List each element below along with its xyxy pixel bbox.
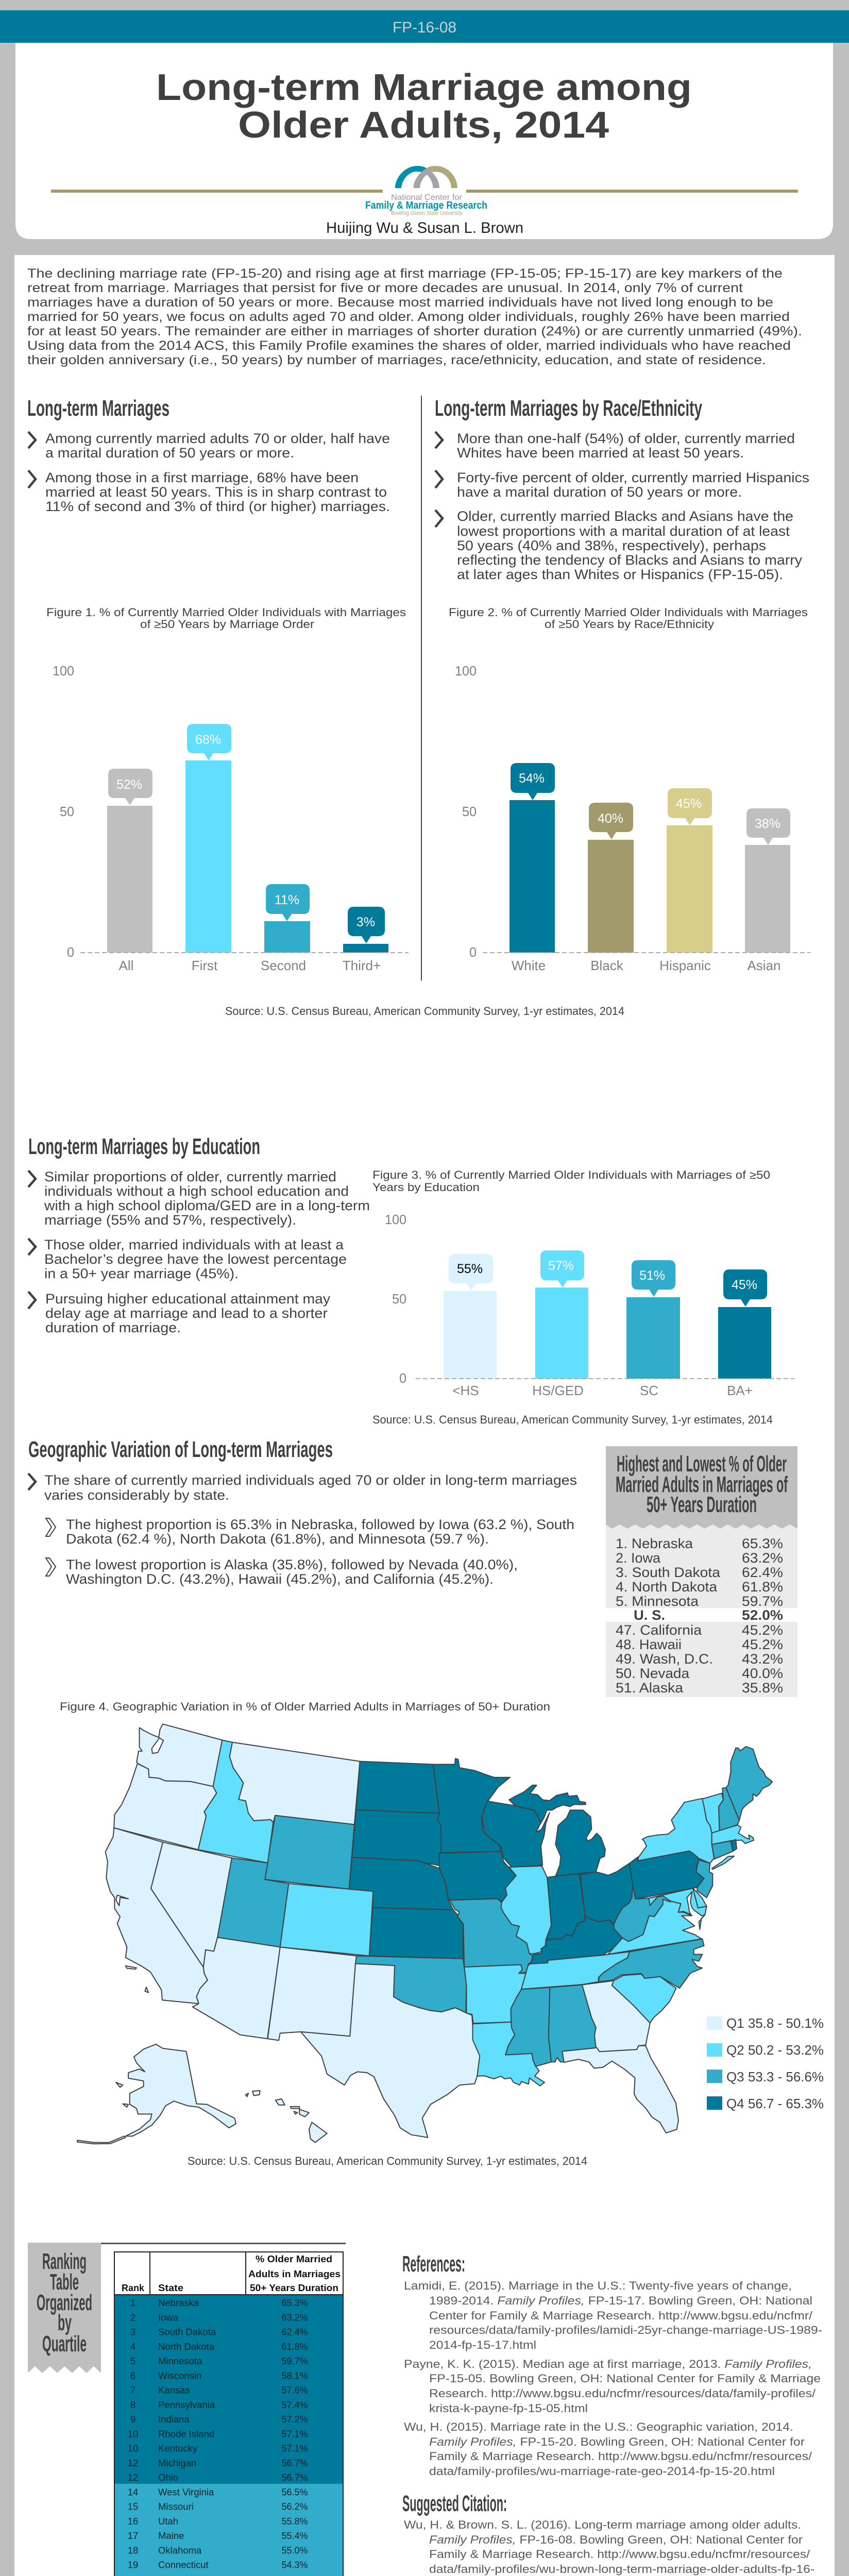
western and plains states: [77, 1724, 516, 2144]
reference: Wu: Family & Marriage Research. http://www.bgsu.edu/ncfmr/resources/: [429, 2450, 812, 2463]
top five list: 59.7%: [742, 1594, 783, 1609]
source note: figures 1 and 2: Source: U.S. Census Bureau, American Community Survey, 1-yr estimates, 2014: [225, 1005, 624, 1018]
bullet: similar proportions: marriage (55% and 57%, respectively).: [44, 1212, 296, 1228]
quartile 3 rows: 56.5%: [281, 2487, 308, 2497]
quartile 3 rows: Oklahoma: [158, 2545, 202, 2555]
sub-bullet: lowest: [46, 1557, 518, 1587]
map legend: Q2 50.2 - 53.2%: [726, 2042, 824, 2058]
top five list: 65.3%: [742, 1536, 783, 1551]
ranking table: [114, 2252, 343, 2576]
bottom five list: 50. Nevada: [616, 1666, 690, 1681]
bar: less than high school: 55%: [457, 1262, 483, 1276]
y axis labels: 50: [462, 804, 477, 819]
bullet: educational attainment: delay age at marriage and lead to a shorter: [45, 1306, 328, 1321]
ranking ribbon: [28, 2243, 346, 2373]
quartile 4 rows: 57.4%: [281, 2400, 308, 2410]
reference: Lamidi: 2014-fp-15-17.html: [429, 2338, 536, 2351]
bar: hispanic: 45%: [676, 796, 702, 811]
y axis labels: 0: [399, 1370, 406, 1386]
bottom five list: 43.2%: [742, 1651, 783, 1667]
citation text: Wu, H. & Brown. S. L. (2016). Long-term marriage among older adults.: [404, 2518, 801, 2531]
reference: Payne: krista-k-payne-fp-15-05.html: [429, 2402, 588, 2415]
authors: Huijing Wu & Susan L. Brown: [326, 219, 523, 236]
logo text: [365, 193, 487, 216]
bar: SC: [626, 1260, 680, 1379]
bullet: blacks and asians: 50 years (40% and 38%, respectively), perhaps: [457, 538, 766, 553]
quartile 3 rows: 56.2%: [281, 2502, 308, 2512]
south-central and southeastern states: [450, 1866, 678, 2133]
quartile 4 rows: 62.4%: [281, 2327, 308, 2337]
quartile 3 rows: 18: [128, 2545, 138, 2555]
bar: all: 52%: [116, 777, 142, 792]
Great Lakes and northeastern states: [509, 1747, 772, 1989]
map legend: [707, 2015, 824, 2111]
quartile 4 rows: Wisconsin: [158, 2370, 201, 2381]
quartile 4 rows: 10: [128, 2428, 138, 2439]
intro paragraph: Using data from the 2014 ACS, this Family Profile examines the shares of older, married individuals who have reached: [27, 338, 791, 353]
U.S. row: 52.0%: [742, 1607, 783, 1623]
ranking ribbon: Organized: [37, 2290, 92, 2315]
bottom five list: 49. Wash, D.C.: [616, 1651, 713, 1667]
sub-bullet: lowest: Washington D.C. (43.2%), Hawaii (45.2%), and California (45.2%).: [66, 1571, 494, 1587]
intro paragraph: for at least 50 years. The remainder are either in marriages of shorter duration (24%) or are currently unmarried (49%).: [27, 324, 802, 338]
y axis labels: 50: [60, 804, 74, 819]
top five list: 5. Minnesota: [616, 1594, 699, 1609]
bullet: first marriage: 11% of second and 3% of third (or higher) marriages.: [45, 499, 390, 514]
bullet: whites: More than one-half (54%) of older, currently married: [457, 431, 795, 446]
citation text: Family & Marriage Research. http://www.bgsu.edu/ncfmr/resources/: [429, 2548, 810, 2561]
quartile 4 rows: 65.3%: [281, 2298, 308, 2308]
vertical column divider: [421, 396, 422, 980]
figure 3 title: Figure 3. % of Currently Married Older Individuals with Marriages of ≥50: [372, 1168, 770, 1181]
bullet: whites: [435, 431, 795, 461]
reference: Wu: Wu, H. (2015). Marriage rate in the U.S.: Geographic variation, 2014.: [404, 2420, 793, 2433]
logo text: Family & Marriage Research: [365, 200, 487, 211]
ranking ribbon: by: [58, 2310, 72, 2335]
sidebar heading: [616, 1451, 788, 1517]
table header: % Older Married: [256, 2254, 332, 2264]
figure 3 title: Years by Education: [372, 1181, 480, 1194]
bullet: blacks and asians: lowest proportions with a marital duration of at least: [457, 523, 790, 539]
logo text: Bowling Green State University: [391, 210, 463, 216]
bottom five list: 48. Hawaii: [616, 1637, 682, 1652]
quartile 4 rows: 12: [128, 2458, 138, 2468]
top five list: 2. Iowa: [616, 1550, 661, 1566]
bar: first: 68%: [195, 733, 221, 747]
citation text: Family Profiles, FP-16-08. Bowling Green, OH: National Center for: [429, 2533, 803, 2546]
heading: Long-term Marriages by Education: [28, 1134, 260, 1159]
sub-bullet: lowest: The lowest proportion is Alaska (35.8%), followed by Nevada (40.0%),: [66, 1557, 518, 1572]
y axis labels: [53, 663, 74, 960]
quartile 4 rows: 1: [130, 2297, 135, 2308]
quartile 4 rows: 56.7%: [281, 2472, 308, 2483]
x axis labels: [452, 1383, 753, 1398]
quartile 3 rows: [114, 2484, 343, 2576]
quartile 4 rows: 2: [130, 2312, 135, 2323]
quartile 4 rows: 63.2%: [281, 2312, 308, 2323]
suggested citation: [402, 2491, 814, 2576]
bar: first: [185, 724, 231, 953]
bar: BA+: [718, 1269, 771, 1379]
bullet: first marriage: Among those in a first marriage, 68% have been: [45, 470, 359, 485]
bullet: blacks and asians: at later ages than Whites or Hispanics (FP-15-05).: [457, 567, 783, 582]
bar: HS/GED: 57%: [548, 1259, 574, 1273]
bottom five list: [616, 1622, 783, 1696]
bar: SC: 51%: [639, 1268, 665, 1283]
panel: education: [28, 1134, 370, 1335]
bullet: first marriage: married at least 50 years. This is in sharp contrast to: [45, 484, 387, 500]
bullet: similar proportions: individuals without a high school education and: [44, 1183, 349, 1199]
quartile 3 rows: 55.8%: [281, 2516, 308, 2527]
quartile 4 rows: 57.6%: [281, 2385, 308, 2396]
x axis labels: HS/GED: [532, 1383, 584, 1398]
bar: second: [264, 884, 310, 953]
quartile 4 rows: 57.1%: [281, 2429, 308, 2439]
bottom five list: 45.2%: [742, 1622, 783, 1638]
bullet: educational attainment: duration of marriage.: [45, 1320, 181, 1335]
y axis labels: 50: [392, 1291, 406, 1307]
ranking ribbon: Table: [50, 2269, 79, 2295]
x axis labels: Third+: [343, 958, 381, 973]
ranking ribbon: Quartile: [42, 2331, 87, 2357]
y axis labels: [385, 1212, 406, 1386]
top five list: 4. North Dakota: [616, 1579, 718, 1595]
sidebar heading: 50+ Years Duration: [647, 1492, 757, 1517]
U.S. row: U. S.: [634, 1607, 665, 1623]
gold divider rule: [51, 190, 798, 193]
bar: black: 40%: [598, 811, 623, 826]
top five list: 63.2%: [742, 1550, 783, 1566]
references: References:: [402, 2251, 465, 2277]
quartile 4 rows: Pennsylvania: [158, 2399, 215, 2410]
bullet: varies by state: [28, 1472, 577, 1503]
quartile 4 rows: Indiana: [158, 2414, 190, 2425]
bar: white: [510, 763, 555, 953]
quartile 3 rows: Missouri: [158, 2501, 194, 2512]
quartile 4 rows: [114, 2295, 343, 2484]
x axis labels: [119, 958, 381, 973]
quartile 4 rows: 8: [130, 2399, 135, 2410]
bullet: bachelor's: [28, 1237, 347, 1281]
map legend: Q1 35.8 - 50.1%: [726, 2015, 824, 2031]
bottom five list: 51. Alaska: [616, 1680, 684, 1696]
logo text: National Center for: [391, 193, 463, 202]
bullet: educational attainment: [28, 1291, 331, 1335]
U.S. row: [606, 1607, 797, 1623]
reference: Payne: Research. http://www.bgsu.edu/ncfmr/resources/data/family-profiles/: [429, 2387, 816, 2400]
quartile 4 rows: 57.1%: [281, 2443, 308, 2453]
y axis labels: 100: [53, 663, 74, 679]
panel: long-term marriages: [27, 396, 390, 514]
quartile 4 rows: Kansas: [158, 2384, 190, 2396]
intro paragraph: retreat from marriage. Marriages that persist for five or more decades are unusual. In 2014, only 7% of current: [27, 281, 743, 295]
citation text: [404, 2518, 814, 2576]
figure 1 title: [46, 606, 406, 631]
reference: Wu: data/family-profiles/wu-marriage-rate-geo-2014-fp-15-20.html: [429, 2465, 775, 2478]
source note: figure 4: Source: U.S. Census Bureau, American Community Survey, 1-yr estimates, 2014: [188, 2155, 587, 2167]
figure 2 bar chart: [449, 606, 810, 973]
quartile 4 rows: 10: [128, 2443, 138, 2453]
quartile 4 rows: 4: [130, 2341, 135, 2352]
y axis labels: 100: [455, 663, 477, 679]
bar: third+: [343, 907, 388, 953]
intro paragraph: their golden anniversary (i.e., 50 years) by number of marriages, race/ethnicity, education, and state of residence.: [27, 353, 766, 367]
bar: BA+: 45%: [732, 1278, 757, 1292]
bullet: varies by state: The share of currently married individuals aged 70 or older in long-term marriages: [44, 1472, 577, 1488]
bar: third+: 3%: [356, 915, 375, 929]
heading: Long-term Marriages by Race/Ethnicity: [435, 396, 702, 421]
title: Older Adults, 2014: [238, 105, 609, 146]
bullet: educational attainment: Pursuing higher educational attainment may: [45, 1291, 331, 1307]
bullet: half have 50 years: a marital duration of 50 years or more.: [45, 445, 294, 461]
bullet: similar proportions: [28, 1169, 370, 1228]
quartile 4 rows: 56.7%: [281, 2458, 308, 2468]
quartile 4 rows: 7: [130, 2384, 135, 2396]
sub-bullet: highest: [46, 1517, 574, 1547]
top bar with report number: [0, 10, 849, 43]
bottom five list: 35.8%: [742, 1680, 783, 1696]
table header: [114, 2252, 343, 2295]
x axis labels: BA+: [727, 1383, 753, 1398]
bullet: half have 50 years: Among currently married adults 70 or older, half have: [45, 431, 390, 446]
top five list: 61.8%: [742, 1579, 783, 1595]
x axis labels: First: [192, 958, 218, 973]
y axis labels: 0: [67, 944, 74, 960]
bullet: hispanics: Forty-five percent of older, currently married Hispanics: [457, 470, 809, 485]
quartile 3 rows: 54.3%: [281, 2560, 308, 2570]
quartile 4 rows: 9: [130, 2414, 135, 2425]
quartile 4 rows: Nebraska: [158, 2297, 199, 2308]
sub-bullet: highest: Dakota (62.4 %), North Dakota (61.8%), and Minnesota (59.7 %).: [66, 1531, 489, 1547]
quartile 3 rows: 17: [128, 2530, 138, 2541]
source note: figure 3: Source: U.S. Census Bureau, American Community Survey, 1-yr estimates, 2014: [372, 1413, 773, 1426]
reference: Lamidi: Lamidi, E. (2015). Marriage in the U.S.: Twenty-five years of change,: [404, 2279, 792, 2292]
bar: hispanic: [667, 788, 712, 953]
x axis labels: [512, 958, 781, 973]
quartile 4 rows: North Dakota: [158, 2341, 215, 2352]
quartile 4 rows: South Dakota: [158, 2327, 216, 2337]
bullet: similar proportions: with a high school diploma/GED are in a long-term: [44, 1198, 370, 1213]
bullet: blacks and asians: Older, currently married Blacks and Asians have the: [457, 509, 793, 524]
x axis labels: Asian: [747, 958, 781, 973]
quartile 4 rows: 3: [130, 2327, 135, 2337]
figure 1 title: of ≥50 Years by Marriage Order: [140, 618, 314, 631]
logo: NCFMR arches: [395, 166, 457, 188]
figure 3 title: [372, 1168, 770, 1194]
quartile 3 rows: Maine: [158, 2530, 184, 2541]
Wisconsin: [482, 1801, 550, 1867]
heading: Geographic Variation of Long-term Marriages: [28, 1437, 333, 1462]
bar: less than high school: [444, 1254, 497, 1379]
bullet: bachelor's: in a 50+ year marriage (45%).: [44, 1266, 239, 1281]
heading: Long-term Marriages: [27, 396, 169, 421]
reference: Lamidi: Center for Family & Marriage Research. http://www.bgsu.edu/ncfmr/: [429, 2309, 813, 2322]
quartile 3 rows: 55.4%: [281, 2531, 308, 2541]
quartile 4 rows: 58.1%: [281, 2370, 308, 2381]
quartile 3 rows: 15: [128, 2501, 138, 2512]
bottom five list: 40.0%: [742, 1666, 783, 1681]
quartile 3 rows: West Virginia: [158, 2486, 214, 2497]
y axis labels: [455, 663, 477, 960]
x axis labels: All: [119, 958, 133, 973]
quartile 3 rows: 16: [128, 2516, 138, 2527]
bullet: blacks and asians: [435, 509, 803, 582]
reference: Lamidi: resources/data/family-profiles/lamidi-25yr-change-marriage-US-1989-: [429, 2324, 822, 2336]
reference: Payne: Payne, K. K. (2015). Median age at first marriage, 2013. Family Profiles,: [404, 2358, 812, 2370]
bullet: bachelor's: Those older, married individuals with at least a: [44, 1237, 344, 1252]
intro paragraph: The declining marriage rate (FP-15-20) and rising age at first marriage (FP-15-05; FP-15-17) are key markers of the: [27, 266, 783, 281]
bullet: blacks and asians: reflecting the tendency of Blacks and Asians to marry: [457, 552, 803, 568]
bottom five list: 45.2%: [742, 1637, 783, 1652]
quartile 3 rows: Connecticut: [158, 2560, 209, 2570]
x axis labels: White: [512, 958, 546, 973]
sub-bullet: highest: The highest proportion is 65.3% in Nebraska, followed by Iowa (63.2 %), South: [66, 1517, 574, 1532]
bullet: first marriage: [28, 470, 390, 514]
quartile 4 rows: Iowa: [158, 2312, 179, 2323]
figure 1 bar chart: [46, 606, 409, 973]
x axis labels: Hispanic: [659, 958, 711, 973]
bullet: similar proportions: Similar proportions of older, currently married: [44, 1169, 336, 1184]
x axis labels: SC: [640, 1383, 658, 1398]
figure 2 title: of ≥50 Years by Race/Ethnicity: [545, 618, 714, 631]
table header: State: [158, 2283, 183, 2293]
top five list: 62.4%: [742, 1565, 783, 1580]
intro paragraph: [27, 266, 802, 367]
reference: Wu: Family Profiles, FP-15-20. Bowling Green, OH: National Center for: [429, 2435, 805, 2448]
table header: Rank: [122, 2283, 145, 2293]
quartile 4 rows: Kentucky: [158, 2443, 198, 2453]
top five list: 3. South Dakota: [616, 1565, 721, 1580]
ranking ribbon: Ranking: [42, 2249, 87, 2274]
top five list: [616, 1536, 783, 1609]
citation text: data/family-profiles/wu-brown-long-term-marriage-older-adults-fp-16-: [429, 2563, 814, 2575]
bullet: hispanics: [435, 470, 809, 500]
title: Long-term Marriage among: [156, 67, 692, 108]
table header: Adults in Marriages: [248, 2269, 341, 2279]
bar: asian: [745, 808, 790, 953]
figure 1 title: Figure 1. % of Currently Married Older Individuals with Marriages: [46, 606, 406, 619]
x axis labels: Black: [590, 958, 624, 973]
bullet: bachelor's: Bachelor’s degree have the lowest percentage: [44, 1251, 347, 1267]
map legend: Q4 56.7 - 65.3%: [726, 2096, 824, 2111]
quartile 4 rows: 59.7%: [281, 2356, 308, 2366]
quartile 4 rows: 57.2%: [281, 2414, 308, 2425]
bar: black: [588, 803, 634, 953]
suggested citation: Suggested Citation:: [402, 2491, 507, 2516]
bullet: hispanics: have a marital duration of 50 years or more.: [457, 484, 742, 500]
quartile 4 rows: 6: [130, 2370, 135, 2381]
intro paragraph: married for 50 years, we focus on adults aged 70 and older. Among older individuals, roughly 26% have been married: [27, 310, 790, 324]
reference: Payne: [404, 2358, 821, 2415]
quartile 4 rows: Michigan: [158, 2458, 196, 2468]
panel: geographic variation: [28, 1437, 577, 1587]
figure 2 title: [449, 606, 808, 631]
reference: Lamidi: [404, 2279, 822, 2351]
intro paragraph: marriages have a duration of 50 years or more. Because most married individuals have not lived long enough to be: [27, 295, 773, 310]
bar: asian: 38%: [755, 817, 780, 831]
quartile 4 rows: Ohio: [158, 2472, 178, 2483]
table header: 50+ Years Duration: [250, 2283, 338, 2293]
quartile 4 rows: 61.8%: [281, 2342, 308, 2352]
header card: [0, 10, 849, 239]
reference: Payne: FP-15-05. Bowling Green, OH: National Center for Family & Marriage: [429, 2372, 821, 2385]
x axis labels: Second: [261, 958, 306, 973]
references: [402, 2251, 822, 2478]
map legend: Q3 53.3 - 56.6%: [726, 2069, 824, 2084]
quartile 4 rows: 12: [128, 2472, 138, 2483]
bar: HS/GED: [535, 1250, 588, 1379]
x axis labels: <HS: [452, 1383, 479, 1398]
panel: race/ethnicity: [435, 396, 809, 582]
quartile 3 rows: 19: [128, 2560, 138, 2570]
quartile 3 rows: Utah: [158, 2516, 178, 2527]
quartile 4 rows: 5: [130, 2355, 135, 2366]
bullet: varies by state: varies considerably by state.: [44, 1487, 229, 1503]
quartile 4 rows: Minnesota: [158, 2355, 202, 2366]
bar: all: [107, 769, 152, 953]
top five list: 1. Nebraska: [616, 1536, 693, 1551]
figure 3 bar chart: [372, 1168, 794, 1398]
y axis labels: 0: [469, 944, 477, 960]
figure 4 title: Figure 4. Geographic Variation in % of Older Married Adults in Marriages of 50+ Duration: [60, 1700, 550, 1713]
bar: second: 11%: [275, 893, 299, 907]
sidebar: highest and lowest states: [606, 1446, 797, 1697]
bullet: whites: Whites have been married at least 50 years.: [457, 445, 744, 461]
figure 2 title: Figure 2. % of Currently Married Older Individuals with Marriages: [449, 606, 808, 619]
quartile 3 rows: 55.0%: [281, 2545, 308, 2555]
top bar with report number: FP-16-08: [393, 19, 456, 36]
title: [156, 67, 692, 146]
bullet: half have 50 years: [28, 431, 390, 461]
reference: Wu: [404, 2420, 812, 2478]
bottom five list: 47. California: [616, 1622, 702, 1638]
bar: white: 54%: [519, 771, 545, 786]
reference: Lamidi: 1989-2014. Family Profiles, FP-15-17. Bowling Green, OH: National: [429, 2294, 812, 2307]
figure 4: US choropleth map: [77, 1724, 772, 2144]
quartile 3 rows: 14: [128, 2486, 138, 2497]
y axis labels: 100: [385, 1212, 406, 1227]
quartile 4 rows: Rhode Island: [158, 2428, 214, 2439]
